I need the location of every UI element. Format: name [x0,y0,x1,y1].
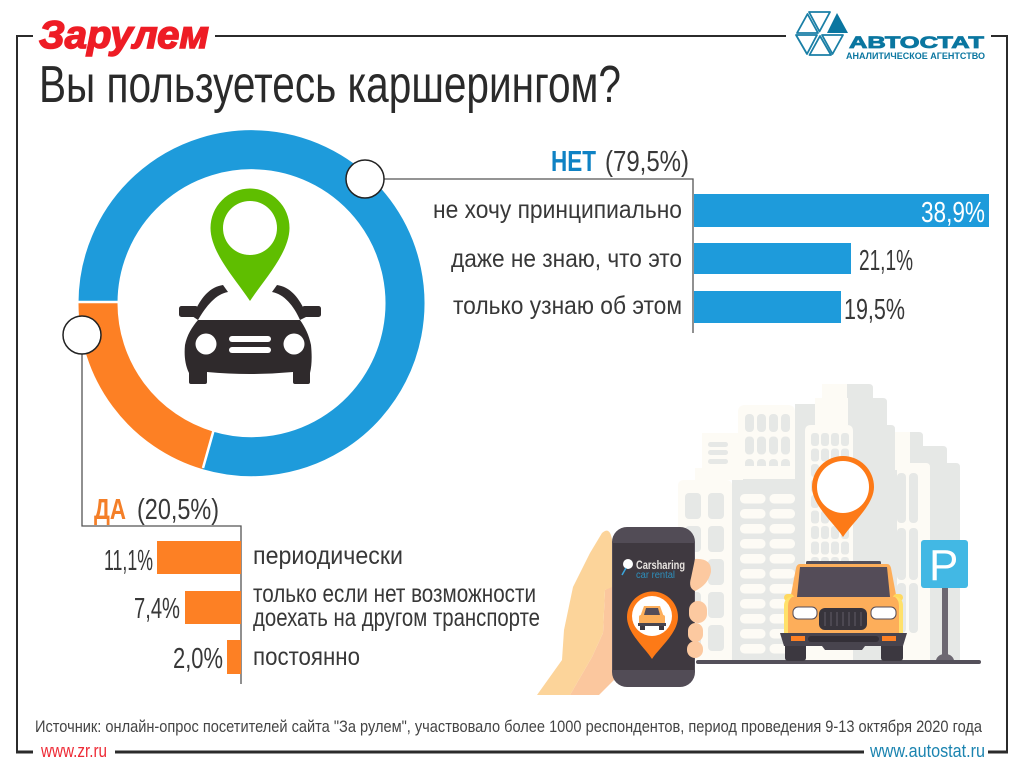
hand palm [570,585,614,695]
logo: Autostat: АНАЛИТИЧЕСКОЕ АГЕНТСТВО [846,51,985,61]
phone screen [613,543,694,670]
icon: parking sign [921,540,968,660]
app subtitle: car rental [636,570,675,581]
app icon [622,559,633,575]
heading: no [551,146,689,178]
leader lines [383,179,693,333]
icon: car with green pin [179,188,321,384]
bar chart: no: не хочу принципиально [433,196,682,224]
bar chart: yes [104,541,540,675]
logo: Autostat [796,12,985,61]
icon: parking sign: P [929,541,958,590]
green pin [210,188,290,301]
illustration: city [678,384,960,660]
bar chart: yes: 2,0% [173,643,223,675]
logo: Autostat: АВТОСТАТ [849,33,985,52]
segment: no 79.5% [98,150,405,457]
bar chart: yes: только если нет возможности [253,580,536,608]
phone pin centre [632,596,672,636]
car silhouette [179,285,321,384]
phone body [612,527,695,687]
link: autostat.ru: www.autostat.ru [869,741,985,761]
bar chart: no: даже не знаю, что это [451,245,682,273]
fingers [687,559,711,658]
heading: yes [94,494,219,526]
illustration: hand and phone [537,527,711,695]
marker: yes [63,316,101,354]
phone pin [627,592,678,659]
ground line [696,660,981,664]
heading: yes: ДА [94,494,126,526]
bar chart: yes: 11,1% [104,545,153,577]
bar chart: yes: периодически [253,542,403,570]
phone pin car [638,606,666,630]
marker: no [346,160,384,198]
donut chart [98,150,405,457]
segment: yes 20.5% [98,303,208,450]
heading: no: НЕТ [551,146,596,178]
heading: yes: (20,5%) [137,494,219,526]
bar chart: no [433,194,989,326]
segment separators [78,302,214,468]
app name: Carsharing [636,558,685,572]
bar chart: yes: доехать на другом транспорте [253,604,540,632]
icon: yellow car [780,561,907,661]
heading: no: (79,5%) [605,146,689,178]
bar chart: yes: 7,4% [134,593,180,625]
bar chart: no: 21,1% [859,245,913,277]
logo: Za rulem: Зарулем [39,14,209,57]
leader line: yes [82,353,241,684]
hand thumb and wrist [537,531,612,695]
bar chart: no: 38,9% [921,197,985,229]
bar chart: no: 19,5% [844,294,905,326]
title: Вы пользуетесь каршерингом? [39,56,621,114]
link: zr.ru: www.zr.ru [40,741,107,761]
icon: orange pin over car [812,456,874,537]
bar chart: yes: постоянно [253,643,360,671]
bar chart: no: только узнаю об этом [453,292,682,320]
